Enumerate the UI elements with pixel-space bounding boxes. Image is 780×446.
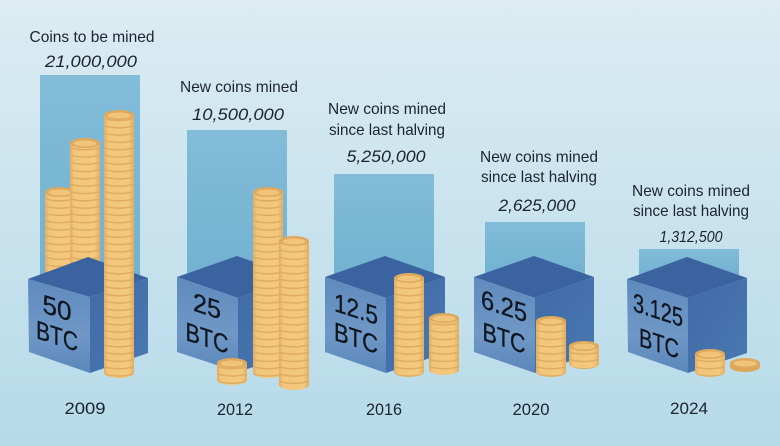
heading: new coins mined since last halving: since last halving bbox=[633, 203, 749, 220]
supply bar bbox=[485, 222, 585, 275]
cube label bbox=[186, 285, 228, 360]
cube: 6.25 BTC bbox=[474, 256, 594, 373]
column: 2012 bbox=[177, 79, 309, 419]
number: 1,312,500: 1,312,500 bbox=[660, 229, 723, 246]
cube label: 25 bbox=[193, 287, 221, 325]
heading: new coins mined since last halving: since last halving bbox=[329, 122, 445, 139]
heading: coins to be mined: Coins to be mined bbox=[30, 29, 154, 46]
cube label bbox=[334, 287, 378, 360]
coin stack small bbox=[429, 313, 459, 375]
heading: new coins mined: New coins mined bbox=[180, 79, 298, 96]
year: 2016: 2016 bbox=[366, 401, 402, 419]
cube: 50 BTC bbox=[28, 257, 148, 373]
number: 21,000,000: 21,000,000 bbox=[44, 52, 138, 71]
column: 2009 bbox=[28, 29, 154, 418]
supply bar bbox=[187, 130, 287, 275]
coin stack medium bbox=[536, 316, 566, 377]
coin stack small bbox=[695, 349, 725, 377]
year: 2024: 2024 bbox=[670, 400, 708, 418]
heading: new coins mined since last halving: New coins mined bbox=[480, 149, 598, 166]
year: 2009: 2009 bbox=[64, 400, 106, 418]
supply bar bbox=[334, 174, 434, 275]
cube label bbox=[633, 287, 683, 366]
number: 2,625,000: 2,625,000 bbox=[497, 196, 576, 215]
cube label: 3.125 bbox=[633, 287, 683, 333]
coin stack short bbox=[45, 187, 75, 290]
coin stack small bbox=[217, 358, 247, 385]
cube label bbox=[36, 287, 78, 358]
number: 5,250,000: 5,250,000 bbox=[346, 147, 426, 166]
cube label bbox=[481, 284, 527, 360]
cube label: BTC bbox=[482, 317, 525, 360]
supply bar bbox=[639, 249, 739, 275]
heading: new coins mined since last halving bbox=[480, 149, 598, 186]
heading: new coins mined since last halving: New coins mined bbox=[632, 183, 750, 200]
coin stack medium bbox=[70, 138, 100, 290]
cube: 12.5 BTC bbox=[325, 256, 445, 373]
column: 2024 bbox=[627, 183, 760, 418]
cube label: BTC bbox=[639, 322, 679, 365]
cube: 25 BTC bbox=[177, 256, 297, 372]
coin stack medium bbox=[279, 236, 309, 390]
heading: new coins mined since last halving bbox=[632, 183, 750, 220]
column: 2016 bbox=[325, 101, 459, 419]
cube label: 12.5 bbox=[334, 287, 378, 331]
cube label: 50 bbox=[42, 289, 72, 328]
coin stack tall bbox=[104, 110, 134, 378]
column: 2020 bbox=[474, 149, 599, 419]
heading: new coins mined since last halving: since last halving bbox=[481, 169, 597, 186]
cube label: BTC bbox=[334, 316, 378, 360]
coin stack tall bbox=[394, 273, 424, 377]
coin stack small bbox=[569, 341, 599, 369]
cube label: BTC bbox=[36, 315, 78, 358]
cube: 3.125 BTC bbox=[627, 257, 747, 373]
heading: new coins mined since last halving bbox=[328, 101, 446, 139]
cube label: 6.25 bbox=[481, 284, 527, 328]
cube label: BTC bbox=[186, 317, 229, 360]
year: 2012: 2012 bbox=[217, 401, 253, 419]
number: 10,500,000: 10,500,000 bbox=[192, 105, 285, 124]
supply bar bbox=[40, 75, 140, 275]
coin stack tall bbox=[253, 187, 283, 378]
single coin bbox=[730, 358, 760, 372]
year: 2020: 2020 bbox=[512, 401, 550, 419]
heading: new coins mined since last halving: New coins mined bbox=[328, 101, 446, 118]
